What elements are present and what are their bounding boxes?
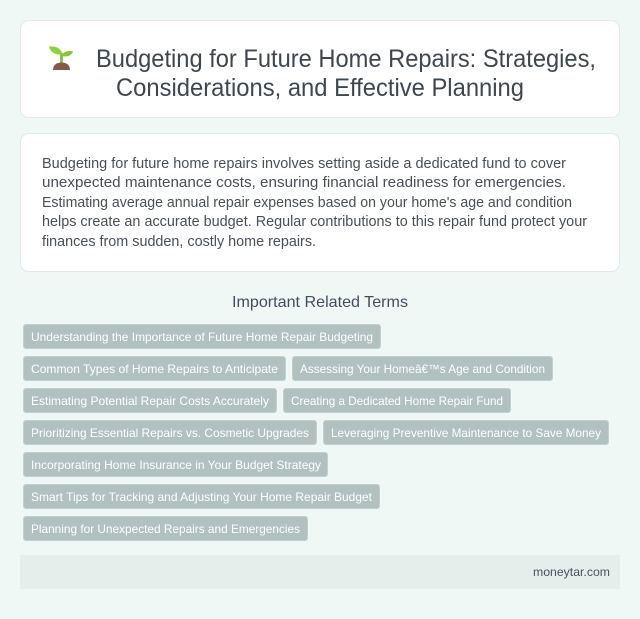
title (96, 45, 596, 102)
footer: moneytar.com (533, 565, 610, 579)
heading: related terms: Important Related Terms (232, 294, 408, 311)
tag (24, 452, 328, 476)
summary text: Estimating average annual repair expenses based on your home's age and condition (42, 194, 572, 211)
tag: Estimating Potential Repair Costs Accurately (31, 394, 269, 408)
tag (24, 516, 308, 540)
tag: Common Types of Home Repairs to Anticipate (31, 362, 278, 376)
summary text: helps create an accurate budget. Regular contributions to this repair fund protect your (42, 213, 587, 230)
footer (20, 555, 620, 589)
summary text: finances from sudden, costly home repairs. (42, 233, 316, 250)
tag: Incorporating Home Insurance in Your Budget Strategy (31, 458, 321, 472)
panel: summary card (20, 134, 620, 272)
summary text: unexpected maintenance costs, ensuring financial readiness for emergencies. (42, 174, 566, 191)
tag: Planning for Unexpected Repairs and Emergencies (31, 522, 300, 536)
panel: title card (20, 20, 620, 118)
tag: Leveraging Preventive Maintenance to Save Money (331, 426, 601, 440)
tag: Creating a Dedicated Home Repair Fund (291, 394, 503, 408)
tag: Smart Tips for Tracking and Adjusting Your Home Repair Budget (31, 490, 373, 504)
title: Considerations, and Effective Planning (116, 74, 524, 102)
tag (24, 420, 316, 444)
tag (292, 356, 552, 380)
summary text: Budgeting for future home repairs involves setting aside a dedicated fund to cover (42, 155, 566, 172)
tag: Prioritizing Essential Repairs vs. Cosmetic Upgrades (31, 426, 309, 440)
title: Budgeting for Future Home Repairs: Strategies, (96, 45, 596, 73)
tag (24, 388, 276, 412)
tag (24, 484, 380, 508)
icon: seedling (49, 46, 73, 70)
tag: Understanding the Importance of Future Home Repair Budgeting (31, 330, 373, 344)
tag (24, 324, 380, 348)
tags: related terms (24, 324, 608, 540)
tag: Assessing Your Homeâ€™s Age and Condition (300, 362, 545, 376)
tag (24, 356, 286, 380)
tag (284, 388, 510, 412)
summary text (42, 155, 587, 250)
tag (324, 420, 608, 444)
